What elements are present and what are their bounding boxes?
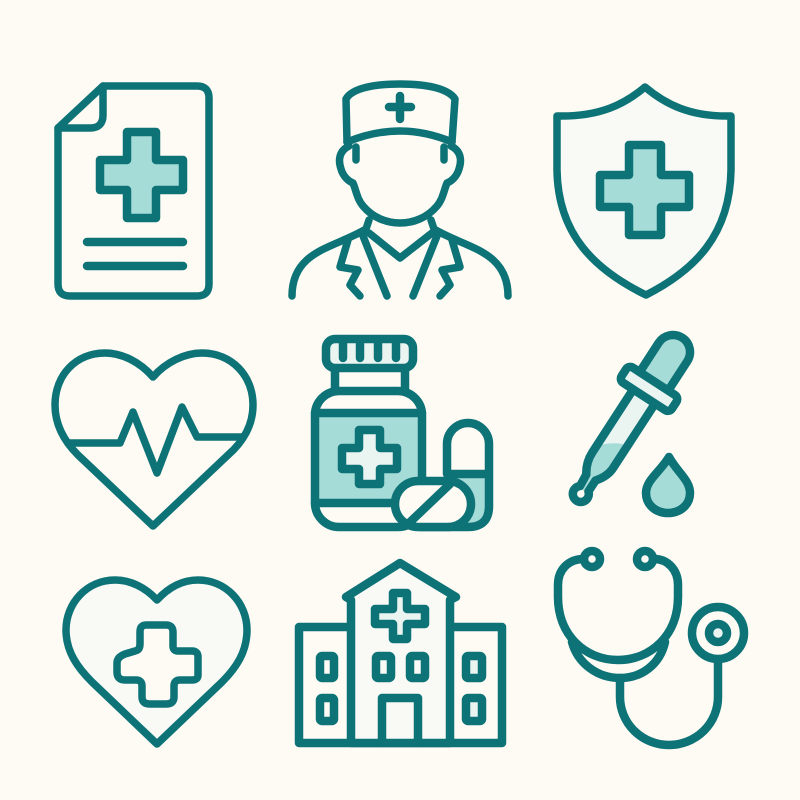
hospital cross xyxy=(375,593,425,639)
hospital windows xyxy=(320,656,482,721)
upright capsule xyxy=(420,423,489,527)
icon: droplet xyxy=(646,457,690,513)
bottle cap xyxy=(326,339,413,368)
tilted pill xyxy=(395,481,471,527)
icon: dropper xyxy=(551,321,707,517)
hospital wings xyxy=(299,627,502,743)
dropper bulb xyxy=(635,328,697,398)
bottle neck xyxy=(335,368,405,391)
hospital central block and roof xyxy=(346,563,456,743)
bottle body xyxy=(315,391,422,527)
hospital door xyxy=(382,698,418,743)
icon: hospital building xyxy=(299,563,502,743)
icon: shield with cross xyxy=(557,87,731,295)
bottle label cross xyxy=(342,430,397,484)
icon: heart with pulse xyxy=(55,353,253,526)
icon: medical document xyxy=(58,86,209,296)
dropper tube xyxy=(566,389,655,508)
dropper collar xyxy=(619,365,679,413)
icon: heart with cross xyxy=(66,580,247,744)
icon: doctor xyxy=(292,84,508,296)
icon: pill bottle with capsules xyxy=(315,339,489,527)
icon: stethoscope xyxy=(558,551,744,745)
